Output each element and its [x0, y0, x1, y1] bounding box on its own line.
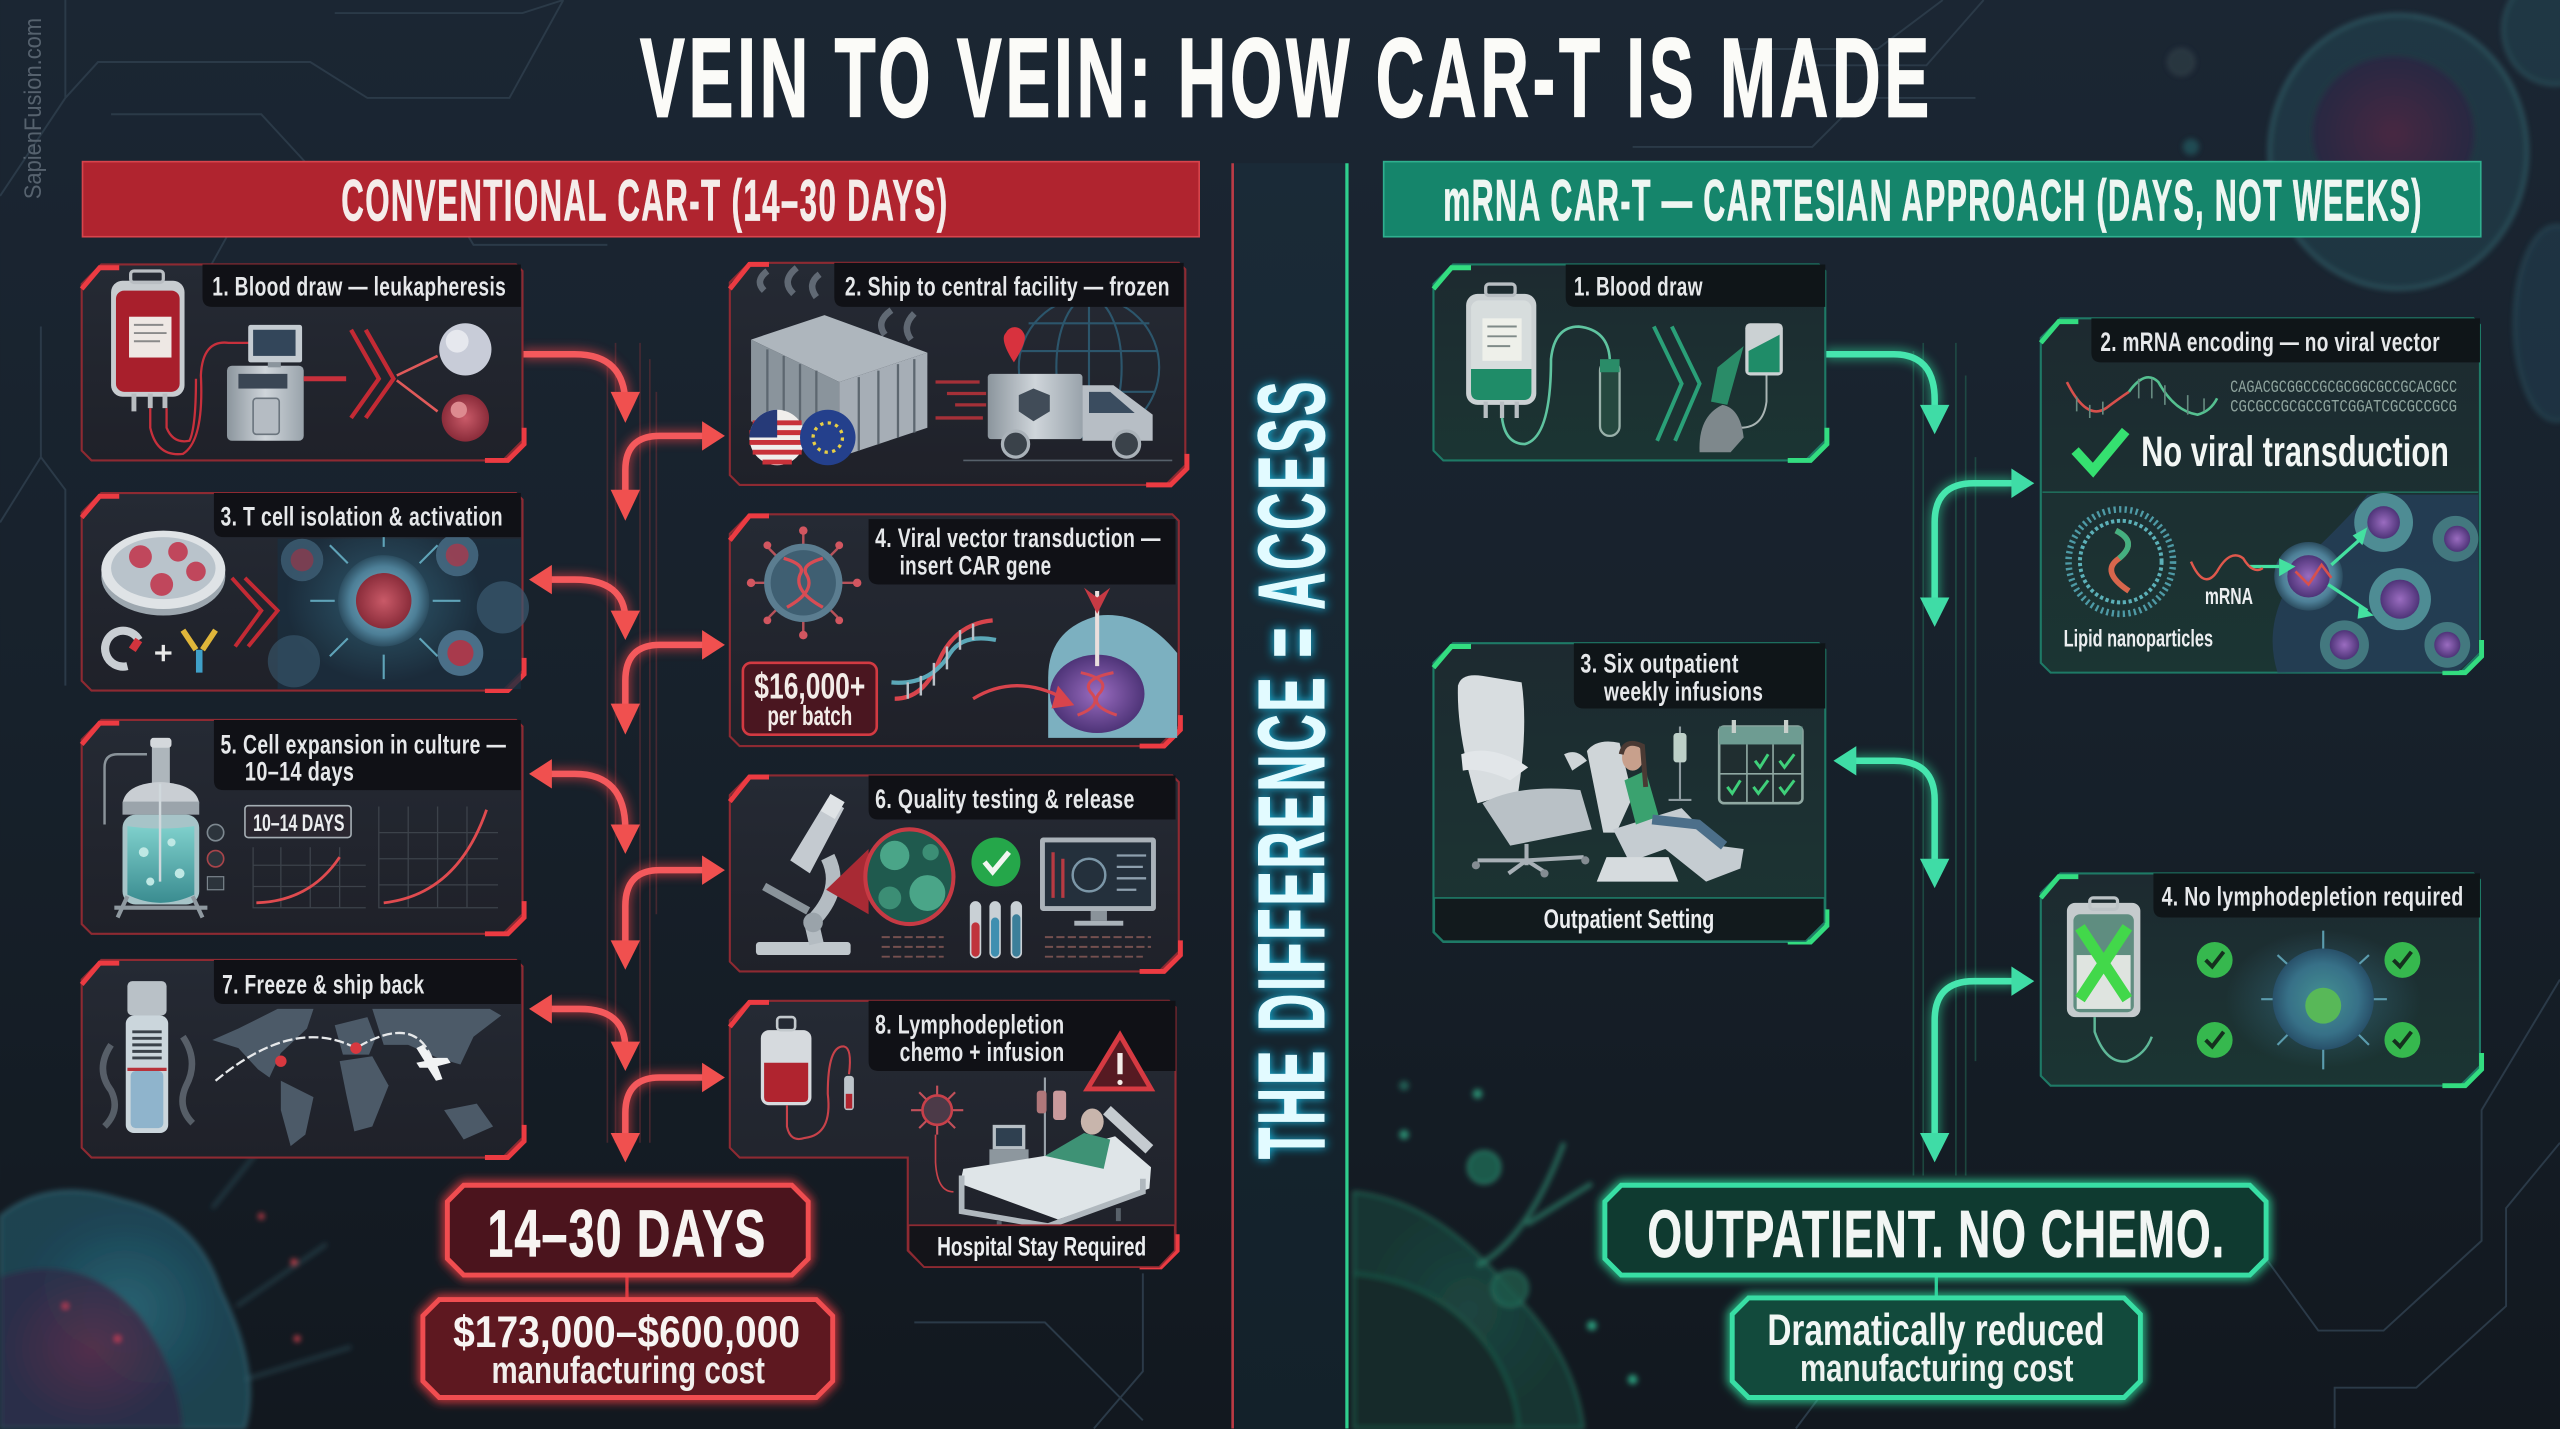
- heading: 10–14 days: [245, 756, 354, 786]
- caption bar: hospital stay required: [909, 1225, 1175, 1267]
- heading: [875, 523, 1161, 581]
- icon: calendar: [1719, 720, 1802, 803]
- heading: 6. Quality testing & release: [875, 784, 1135, 814]
- watermark: SapienFusion.com: [20, 18, 47, 199]
- heading: 2. Ship to central facility — frozen: [845, 271, 1170, 301]
- icon: green blood bag: [1466, 284, 1536, 418]
- icon: mRNA wave: [2191, 555, 2263, 579]
- icon: tube and sample vial: [1502, 327, 1620, 444]
- illustration: transfected cells: [2250, 493, 2478, 673]
- panel: mRNA step 4 no lymphodepletion: [2041, 873, 2482, 1086]
- icon: petri dish: [101, 531, 225, 615]
- icon: world map: [212, 1009, 501, 1146]
- panel: step 8 lymphodepletion: [730, 1001, 1177, 1267]
- icon: small bag and arm: [1699, 323, 1783, 452]
- connector: outpatient to cost: [1935, 1275, 1937, 1300]
- icon: lipid nanoparticle: [2069, 509, 2173, 614]
- icon: cryo vial: [103, 981, 193, 1133]
- panel: step 6 quality testing: [730, 775, 1180, 971]
- stat: 14-30 days: [447, 1185, 808, 1275]
- icon: bioreactor: [105, 738, 224, 918]
- centre divider: [1233, 163, 1347, 1429]
- background: central bus traces: [607, 343, 1975, 1175]
- icon: chevrons: [1654, 327, 1700, 441]
- callout: 10-14 days: [245, 806, 351, 838]
- stat: reduced cost: [1732, 1298, 2140, 1397]
- icon: microscope: [756, 794, 869, 955]
- panel: step 7 freeze and ship back: [82, 960, 524, 1158]
- background: cell top right: [2168, 0, 2560, 421]
- sequence text: CAGACGCGGCCGCGCGGCGCCGCACGCC: [2230, 378, 2457, 398]
- connector: days to cost: [626, 1275, 628, 1300]
- icon: crossed-out bag: [2067, 898, 2152, 1061]
- icon: target cell and CAR gene insert: [973, 588, 1177, 738]
- heading: 3. Six outpatient: [1580, 649, 1739, 679]
- icon: warning triangle: [1087, 1035, 1151, 1089]
- stat: outpatient no chemo: [1605, 1185, 2266, 1275]
- label: mRNA: mRNA: [2205, 583, 2253, 609]
- icon: chevrons: [351, 330, 394, 418]
- callout: 10-14 days: 10–14 DAYS: [253, 811, 345, 837]
- panel: step 3 T cell isolation: [82, 493, 529, 691]
- icon: apheresis machine: [227, 325, 346, 441]
- icon: mRNA strand: [2067, 377, 2217, 418]
- icon: activated T cell field: [268, 519, 529, 689]
- chart: growth curve small: [253, 847, 366, 908]
- arrows: conventional flow: [522, 354, 725, 1162]
- stat: 14-30 days: 14–30 DAYS: [487, 1196, 767, 1271]
- icon: check badge: [971, 838, 1020, 886]
- icon: test tubes: [970, 901, 1022, 958]
- icon: check badges: [2197, 942, 2420, 1058]
- panel: step 1 blood draw leukapheresis: [82, 264, 524, 460]
- icon: monitor: [1040, 838, 1156, 926]
- stat: cost range: [423, 1300, 833, 1397]
- heading: insert CAR gene: [900, 551, 1051, 581]
- panel: step 2 ship to central facility: [730, 263, 1187, 485]
- icon: chevron: [232, 578, 278, 647]
- caption bar: outpatient setting: Outpatient Setting: [1544, 904, 1714, 934]
- icon: magnified cells: [865, 829, 953, 924]
- caption bar: outpatient setting: [1434, 898, 1824, 941]
- caption bar: hospital stay required: Hospital Stay Required: [937, 1231, 1146, 1261]
- icon: sorted cells: [397, 323, 491, 442]
- sequence text: [2230, 378, 2457, 417]
- icon: empty infusion chair: [1458, 675, 1592, 878]
- heading: 1. Blood draw — leukapheresis: [212, 271, 506, 301]
- heading: 8. Lymphodepletion: [875, 1009, 1064, 1039]
- icon: frozen container: [751, 268, 927, 457]
- route: flight path: [216, 1033, 451, 1081]
- stat: cost range: $173,000–$600,000: [453, 1308, 800, 1357]
- sequence text: CGCGCCGCGCCGTCGGATCGCGCCGCG: [2230, 397, 2457, 417]
- icon: globe and location pin: [1004, 297, 1159, 438]
- stat: reduced cost: manufacturing cost: [1800, 1347, 2074, 1389]
- icon: viral vector: [747, 526, 861, 639]
- icon: blood bag: [111, 271, 185, 411]
- panel: mRNA step 2 encoding: [2041, 318, 2482, 673]
- heading: 4. Viral vector transduction —: [875, 523, 1161, 553]
- panel: step 4 viral vector transduction: [730, 514, 1180, 746]
- callout: price per batch: $16,000+: [754, 666, 865, 707]
- banner: conventional CAR-T: [83, 162, 1199, 237]
- icon: armoured truck: [936, 374, 1172, 460]
- icon: healthy cell: [2225, 931, 2421, 1069]
- icon: hospital bed with patient: [960, 1078, 1151, 1228]
- text: no viral transduction: No viral transduction: [2141, 428, 2449, 475]
- heading: [1580, 649, 1763, 706]
- chart: growth curve large: [379, 806, 498, 908]
- heading: [220, 729, 506, 786]
- icon: magnet plus antibody: [105, 630, 216, 673]
- label: lipid nanoparticles: Lipid nanoparticles: [2064, 627, 2213, 653]
- banner: conventional CAR-T: CONVENTIONAL CAR-T (14–30 DAYS): [341, 168, 949, 233]
- icon: chemo virus: [911, 1086, 963, 1192]
- icon: EU flag: [800, 410, 856, 465]
- icon: tubing: [150, 343, 255, 454]
- callout: price per batch: [743, 663, 877, 735]
- panel: mRNA step 3 outpatient: [1433, 643, 1827, 942]
- heading: chemo + infusion: [900, 1037, 1064, 1067]
- heading: 3. T cell isolation & activation: [220, 502, 503, 532]
- background: green cell bottom centre: [1353, 1081, 1638, 1429]
- heading: 1. Blood draw: [1574, 271, 1703, 301]
- heading: [875, 1009, 1064, 1067]
- icon: patient in reclining chair with IV: [1587, 726, 1744, 882]
- icon: chemo bag: [761, 1017, 854, 1139]
- panel: mRNA step 1 blood draw: [1433, 264, 1827, 460]
- stat: cost range: manufacturing cost: [491, 1349, 765, 1391]
- data ticks: [882, 937, 1151, 957]
- icon: US flag: [749, 410, 805, 465]
- centre label: the difference = access: [1239, 379, 1345, 1159]
- callout: price per batch: per batch: [767, 700, 852, 731]
- panel: step 5 cell expansion: [82, 720, 524, 934]
- icon: check mark: [2075, 431, 2126, 470]
- heading: 7. Freeze & ship back: [222, 969, 425, 999]
- background: cell bottom left: [0, 1110, 351, 1429]
- icon: DNA helix: [891, 620, 996, 699]
- arrows: mRNA flow: [1825, 354, 2034, 1162]
- stat: outpatient no chemo: OUTPATIENT. NO CHEMO.: [1647, 1197, 2225, 1272]
- heading: 5. Cell expansion in culture —: [220, 729, 506, 759]
- stat: reduced cost: Dramatically reduced: [1767, 1306, 2104, 1355]
- heading: weekly infusions: [1603, 676, 1763, 706]
